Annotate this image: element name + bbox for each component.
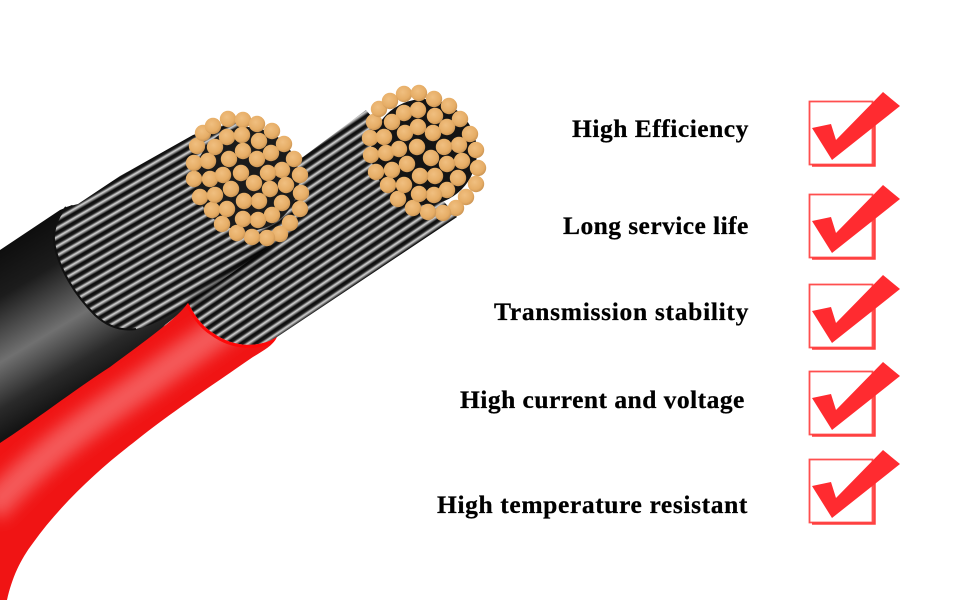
left cable strands <box>54 120 300 329</box>
label: Long service life: Long service life <box>563 211 749 240</box>
label: High current and voltage: High current and voltage <box>460 385 745 414</box>
label: Transmission stability: Transmission stability <box>494 297 749 326</box>
label: High Efficiency: High Efficiency <box>572 114 749 143</box>
right cable strands <box>188 110 457 345</box>
icon: checkbox 1 <box>810 92 900 166</box>
black cable jacket <box>0 205 190 445</box>
icon: checkbox 5 <box>810 450 900 524</box>
icon: checkbox 3 <box>810 275 900 348</box>
label: High temperature resistant: High temperature resistant <box>437 490 748 519</box>
infographic canvas <box>0 84 900 600</box>
red cable jacket <box>0 303 277 600</box>
left copper conductor end <box>186 111 309 246</box>
right copper conductor end <box>362 85 486 221</box>
icon: checkbox 4 <box>810 362 900 436</box>
icon: checkbox 2 <box>810 185 900 258</box>
